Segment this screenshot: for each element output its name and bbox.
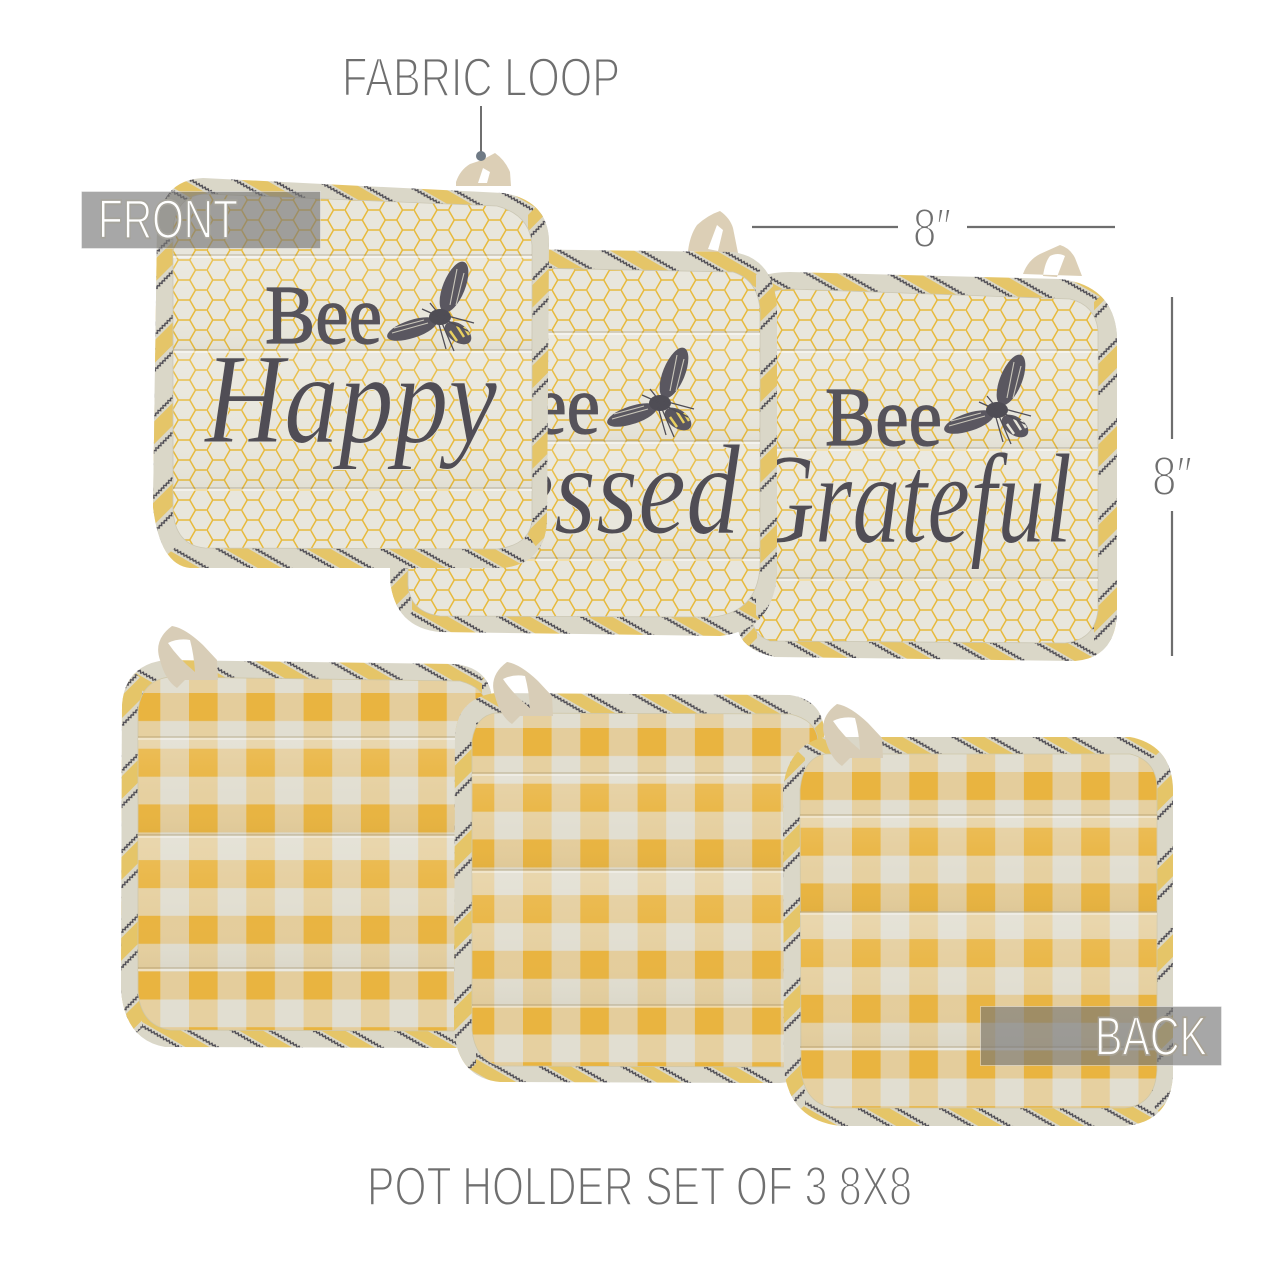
quilting lines: back holder 1	[138, 737, 486, 970]
dimension: width 8 inches: 8″	[913, 197, 951, 259]
fabric loop: Grateful holder	[1023, 245, 1082, 277]
panel: front pot holder Bee Grateful	[730, 245, 1125, 670]
icon: bee (Happy)	[384, 258, 475, 351]
binding: Happy holder	[145, 170, 555, 575]
honeycomb face: Happy holder	[173, 194, 532, 549]
label: BACK	[980, 1005, 1222, 1067]
binding: back holder 3	[775, 730, 1180, 1135]
title: product name: POT HOLDER SET OF 3 8X8	[367, 1155, 912, 1217]
panel: front pot holder Bee Blessed	[385, 211, 785, 645]
quilting lines: Grateful holder	[755, 350, 1098, 580]
panel: back pot holder 1	[110, 626, 500, 1055]
quilting lines: back holder 3	[800, 815, 1157, 1049]
script word: Happy: Happy	[203, 328, 497, 470]
gingham face: back holder 2	[472, 713, 818, 1067]
fabric loop: back holder 2	[493, 662, 553, 724]
binding: back holder 2	[445, 685, 835, 1090]
fabric loop: back holder 1	[158, 626, 218, 688]
panel: back pot holder 2	[445, 662, 835, 1090]
heading: Bee (Blessed): Bee	[483, 359, 600, 452]
icon: bee (Grateful)	[941, 351, 1032, 444]
honeycomb face: Blessed holder	[408, 266, 760, 617]
binding: Blessed holder	[385, 240, 785, 645]
heading: Bee (Happy): Bee	[265, 269, 382, 362]
binding: back holder 1	[110, 650, 500, 1055]
fabric loop: Happy holder	[456, 153, 511, 186]
dimension: height 8 inches: 8″	[1152, 445, 1192, 507]
honeycomb face: Grateful holder	[752, 289, 1098, 643]
label: FRONT: FRONT	[98, 188, 238, 250]
script word: Grateful: Grateful	[745, 428, 1072, 570]
callout: fabric loop label: FABRIC LOOP	[342, 46, 620, 108]
icon: bee (Blessed)	[604, 344, 695, 437]
quilting lines: back holder 2	[472, 773, 818, 1007]
script word: Blessed: Blessed	[410, 419, 741, 561]
heading: Bee (Grateful): Bee	[825, 371, 942, 464]
gingham face: back holder 3	[800, 754, 1157, 1108]
label: BACK: BACK	[1095, 1005, 1207, 1067]
panel: front pot holder Bee Happy	[145, 153, 555, 575]
quilting lines: Blessed holder	[408, 332, 760, 560]
gingham face: back holder 1	[138, 677, 486, 1031]
fabric loop: Blessed holder	[688, 211, 738, 253]
arrow: fabric loop leader line	[476, 106, 486, 161]
quilting lines: Happy holder	[173, 255, 532, 490]
panel: back pot holder 3	[775, 704, 1180, 1135]
fabric loop: back holder 3	[823, 704, 883, 766]
binding: Grateful holder	[730, 265, 1125, 670]
